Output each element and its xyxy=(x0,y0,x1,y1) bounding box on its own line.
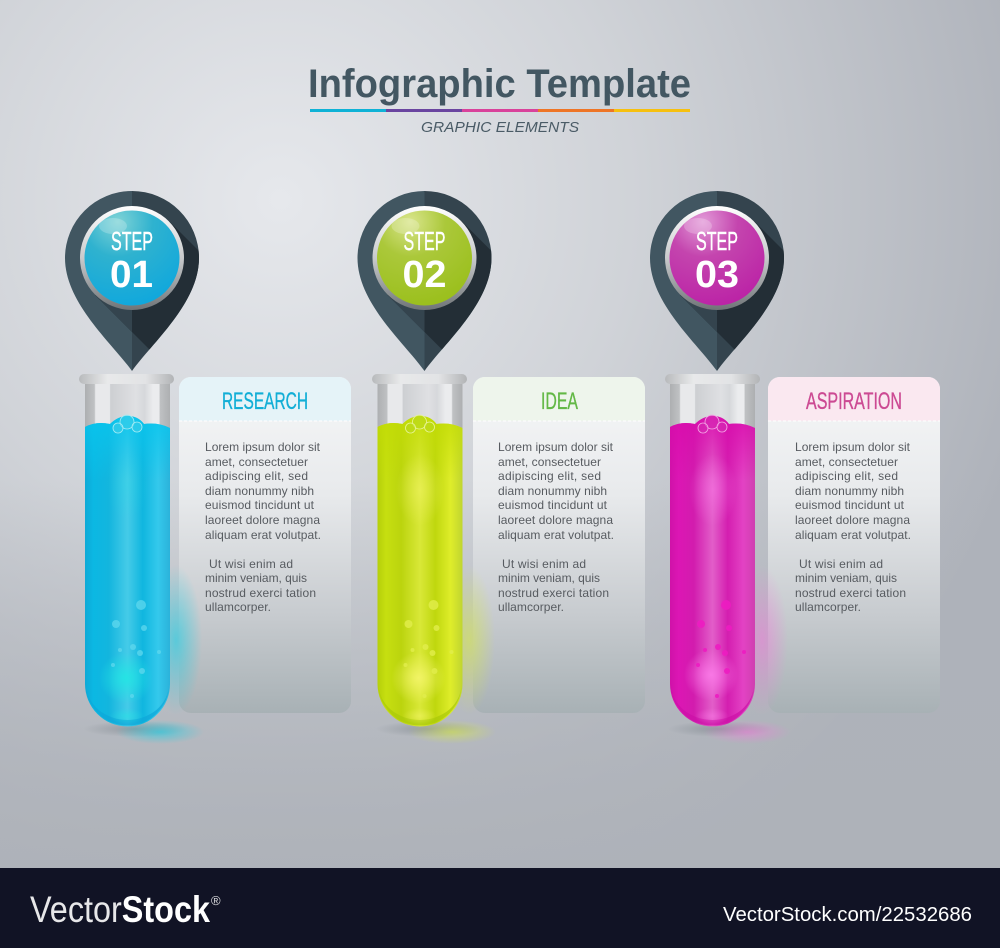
card text: idea: minim veniam, quis xyxy=(498,571,600,585)
test tube: green xyxy=(372,374,496,744)
card text: idea: aliquam erat volutpat. xyxy=(498,528,614,542)
card text: idea: laoreet dolore magna xyxy=(498,513,613,527)
card text: aspiration: Ut wisi enim ad xyxy=(799,557,883,571)
card: aspiration xyxy=(768,377,940,713)
card text: idea: Ut wisi enim ad xyxy=(502,557,586,571)
card text: research: diam nonummy nibh xyxy=(205,484,314,498)
footer logo: VectorStock xyxy=(30,889,210,930)
pin: step 03 xyxy=(650,191,784,371)
card text: aspiration: euismod tincidunt ut xyxy=(795,498,905,512)
footer bar xyxy=(0,868,1000,948)
card text: aspiration: Lorem ipsum dolor sit xyxy=(795,440,911,454)
step label: 03: 03 xyxy=(695,254,739,296)
card text: aspiration: adipiscing elit, sed xyxy=(795,469,898,483)
card text: aspiration: diam nonummy nibh xyxy=(795,484,904,498)
card text: research: ullamcorper. xyxy=(205,600,271,614)
card heading: research: RESEARCH xyxy=(222,388,308,415)
pin: step 02 xyxy=(358,191,492,371)
title underline: five colours xyxy=(310,109,690,112)
card text: idea: nostrud exerci tation xyxy=(498,586,609,600)
card text: idea: ullamcorper. xyxy=(498,600,564,614)
card text: research: minim veniam, quis xyxy=(205,571,307,585)
card text: research: nostrud exerci tation xyxy=(205,586,316,600)
card: research xyxy=(179,377,351,713)
step label: 03 xyxy=(695,226,739,296)
step label: 03: STEP xyxy=(696,226,738,256)
card text: aspiration: aliquam erat volutpat. xyxy=(795,528,911,542)
card heading: aspiration: ASPIRATION xyxy=(806,388,902,415)
card text: research: laoreet dolore magna xyxy=(205,513,320,527)
card text: idea: Lorem ipsum dolor sit xyxy=(498,440,614,454)
card text: research: amet, consectetuer xyxy=(205,455,308,469)
card text: aspiration: nostrud exerci tation xyxy=(795,586,906,600)
pin: step 01 xyxy=(65,191,199,371)
step label: 02: STEP xyxy=(404,226,446,256)
step label: 01 xyxy=(110,226,153,296)
footer image id: VectorStock.com/22532686 xyxy=(723,904,972,926)
card text: aspiration: ullamcorper. xyxy=(795,600,861,614)
card text: aspiration: amet, consectetuer xyxy=(795,455,898,469)
step label: 01: 01 xyxy=(110,254,153,296)
subtitle: GRAPHIC ELEMENTS xyxy=(421,120,579,136)
card text: aspiration: minim veniam, quis xyxy=(795,571,897,585)
card text: idea: amet, consectetuer xyxy=(498,455,601,469)
card heading: idea: IDEA xyxy=(541,388,578,415)
card text: research: adipiscing elit, sed xyxy=(205,469,308,483)
title: Infographic Template xyxy=(308,62,691,106)
card text: idea: diam nonummy nibh xyxy=(498,484,607,498)
card text: idea: euismod tincidunt ut xyxy=(498,498,608,512)
test tube: magenta xyxy=(665,374,791,744)
card text: research: Ut wisi enim ad xyxy=(209,557,293,571)
card text: idea: adipiscing elit, sed xyxy=(498,469,601,483)
step label: 02: 02 xyxy=(402,254,446,296)
step label: 01: STEP xyxy=(111,226,153,256)
card text: research: aliquam erat volutpat. xyxy=(205,528,321,542)
footer registered mark: ® xyxy=(211,893,221,908)
step label: 02 xyxy=(402,226,446,296)
card text: research: Lorem ipsum dolor sit xyxy=(205,440,321,454)
test tube: blue xyxy=(79,374,204,744)
card text: research: euismod tincidunt ut xyxy=(205,498,315,512)
card text: aspiration: laoreet dolore magna xyxy=(795,513,910,527)
card: idea xyxy=(473,377,645,713)
